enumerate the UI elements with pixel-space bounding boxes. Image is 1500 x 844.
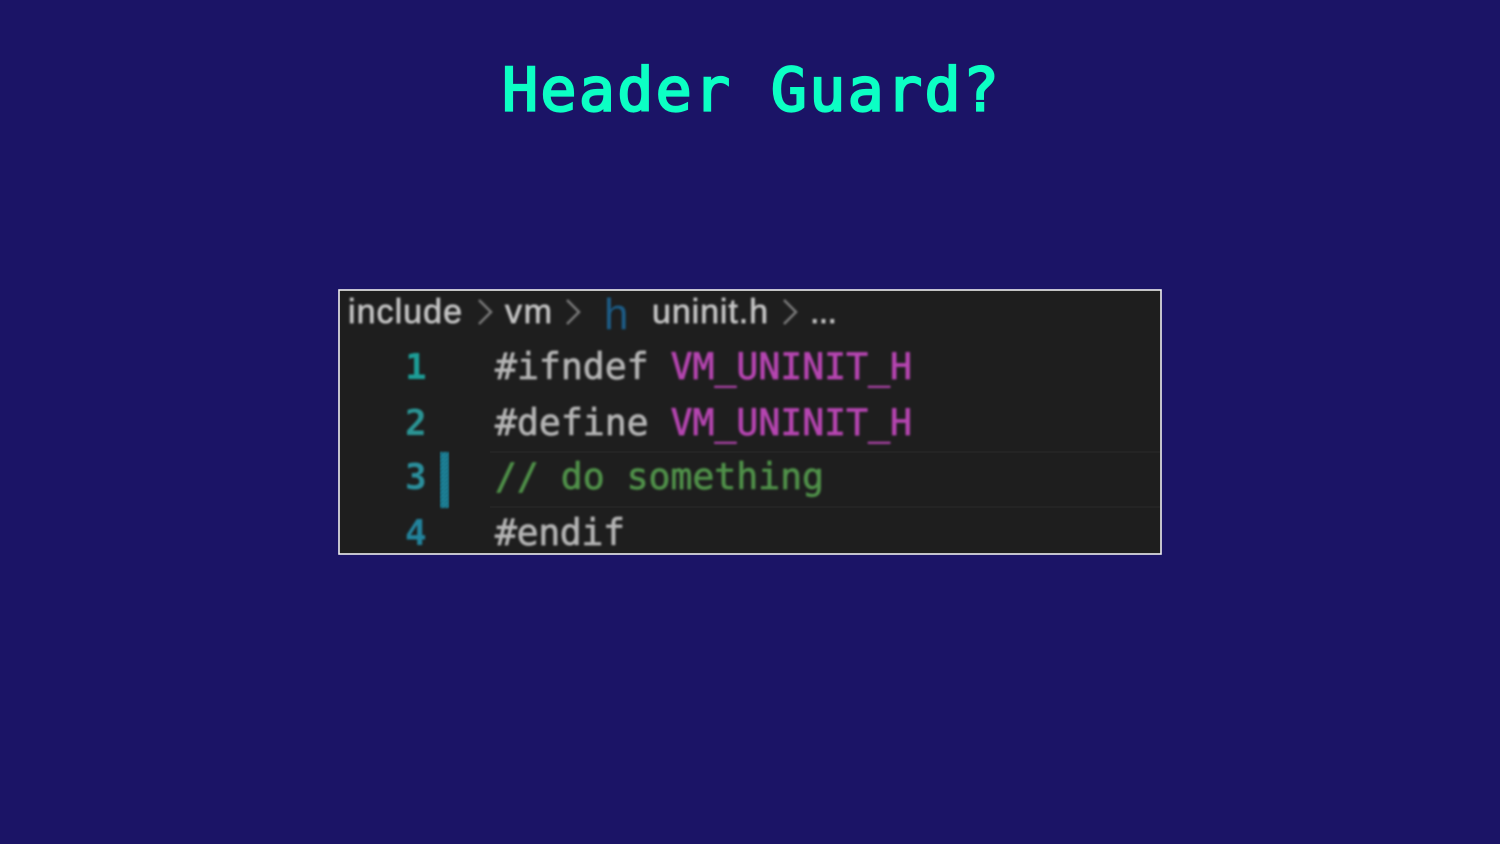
code lines: #endif <box>495 511 625 554</box>
icon: header file: h <box>604 290 628 339</box>
code lines: #ifndef VM_UNINIT_H <box>495 345 912 389</box>
title: Header Guard? <box>502 56 999 126</box>
line numbers <box>405 347 427 554</box>
code lines <box>495 345 912 554</box>
line numbers: 2 <box>405 403 427 444</box>
change marker <box>440 452 449 508</box>
code lines: #define VM_UNINIT_H <box>495 401 912 445</box>
breadcrumb: include <box>348 293 462 331</box>
line numbers: 1 <box>405 347 427 388</box>
breadcrumb: vm <box>505 293 552 331</box>
panel: code screenshot <box>339 290 1161 554</box>
breadcrumb: uninit.h <box>652 293 768 331</box>
breadcrumb: ... <box>810 293 837 331</box>
code lines: // do something <box>495 455 824 498</box>
line numbers: 4 <box>405 513 427 554</box>
line numbers: 3 <box>405 457 427 498</box>
breadcrumb <box>348 290 837 339</box>
current line highlight <box>490 452 1160 507</box>
